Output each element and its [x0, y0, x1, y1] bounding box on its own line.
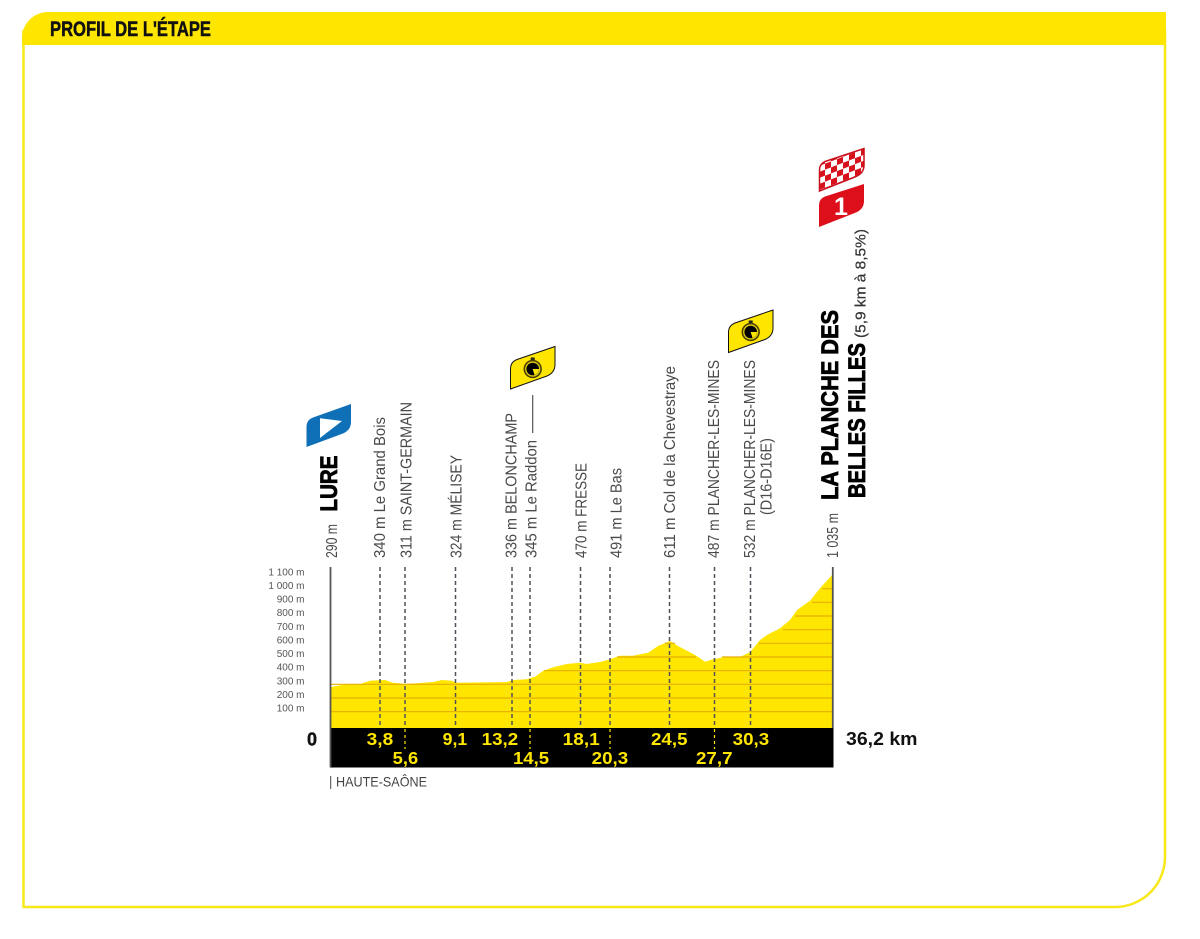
icon: time check Belonchamp — [510, 346, 555, 389]
department label: HAUTE-SAÔNE — [336, 774, 427, 790]
finish: La Planche des Belles Filles: LA PLANCHE DES — [817, 310, 844, 500]
altitude scale labels: 1 100 m — [268, 567, 304, 578]
total distance: 36,2 km — [846, 729, 918, 749]
altitude scale labels: 800 m — [277, 608, 304, 619]
icon: checkered finish flag — [820, 148, 864, 191]
band tick dashes — [405, 729, 714, 749]
distance markers: 18,1 — [563, 729, 600, 749]
finish: La Planche des Belles Filles — [817, 229, 871, 558]
distance markers: 9,1 — [443, 729, 467, 749]
label: Plancher-les-Mines D16: (D16-D16E) — [758, 438, 776, 515]
distance markers: 30,3 — [733, 729, 769, 749]
altitude scale labels: 200 m — [277, 690, 304, 701]
waypoint dashed lines — [380, 567, 750, 728]
header: title band — [22, 12, 1166, 45]
distance markers: 13,2 — [482, 729, 518, 749]
distance markers: 14,5 — [513, 748, 549, 768]
altitude scale labels: 600 m — [277, 636, 304, 646]
altitude scale labels — [268, 567, 304, 714]
finish: La Planche des Belles Filles: (5,9 km à 8,5%) — [854, 229, 870, 338]
label: Fresse: 470 m FRESSE — [574, 463, 591, 558]
icon: start flag — [306, 404, 351, 447]
distance markers: 27,7 — [696, 748, 732, 768]
title: PROFIL DE L'ÉTAPE — [50, 18, 211, 41]
elevation area — [331, 575, 832, 728]
altitude scale labels: 500 m — [277, 649, 304, 660]
altitude scale labels: 700 m — [277, 622, 304, 633]
chart: elevation profile — [268, 567, 918, 790]
start: Lure: LURE — [316, 456, 343, 512]
altitude scale labels: 1 000 m — [268, 581, 304, 592]
altitude scale labels: 100 m — [277, 704, 304, 714]
distance band — [330, 728, 834, 768]
label: Plancher-les-Mines D16: 532 m PLANCHER-LES-MINES — [742, 360, 759, 558]
axes — [330, 567, 833, 767]
label: Le Bas: 491 m Le Bas — [608, 468, 626, 558]
label: Plancher-les-Mines D16 — [742, 360, 776, 558]
label: Mélisey: 324 m MÉLISEY — [449, 455, 466, 558]
distance markers: 20,3 — [592, 748, 628, 768]
label: Plancher-les-Mines: 487 m PLANCHER-LES-MINES — [706, 360, 723, 558]
distance markers: 24,5 — [651, 729, 688, 749]
icon: red category 1 flag: 1 — [834, 193, 848, 221]
icon: red category 1 flag — [819, 184, 864, 227]
altitude scale labels: 300 m — [277, 676, 304, 687]
start: Lure: 290 m — [324, 524, 341, 558]
altitude scale labels: 400 m — [277, 662, 304, 674]
distance markers — [367, 729, 769, 768]
altitude grid lines — [331, 589, 832, 712]
finish: La Planche des Belles Filles: BELLES FILLES — [844, 343, 871, 498]
waypoint labels — [316, 229, 871, 558]
start: Lure — [316, 456, 343, 558]
distance markers: 5,6 — [393, 748, 418, 768]
distance markers: 3,8 — [367, 729, 393, 749]
start distance: 0 — [307, 730, 317, 750]
altitude scale labels: 900 m — [277, 594, 304, 606]
label: Le Raddon: 345 m Le Raddon — [524, 440, 541, 558]
label: Belonchamp: 336 m BELONCHAMP — [504, 413, 521, 558]
icon: time check Plancher-les-Mines — [728, 310, 773, 352]
label: Saint-Germain: 311 m SAINT-GERMAIN — [398, 402, 416, 558]
label: Le Grand Bois: 340 m Le Grand Bois — [372, 417, 389, 558]
finish: La Planche des Belles Filles: 1 035 m — [825, 513, 842, 558]
label: Col de la Chevestraye: 611 m Col de la Chevestraye — [662, 366, 679, 558]
